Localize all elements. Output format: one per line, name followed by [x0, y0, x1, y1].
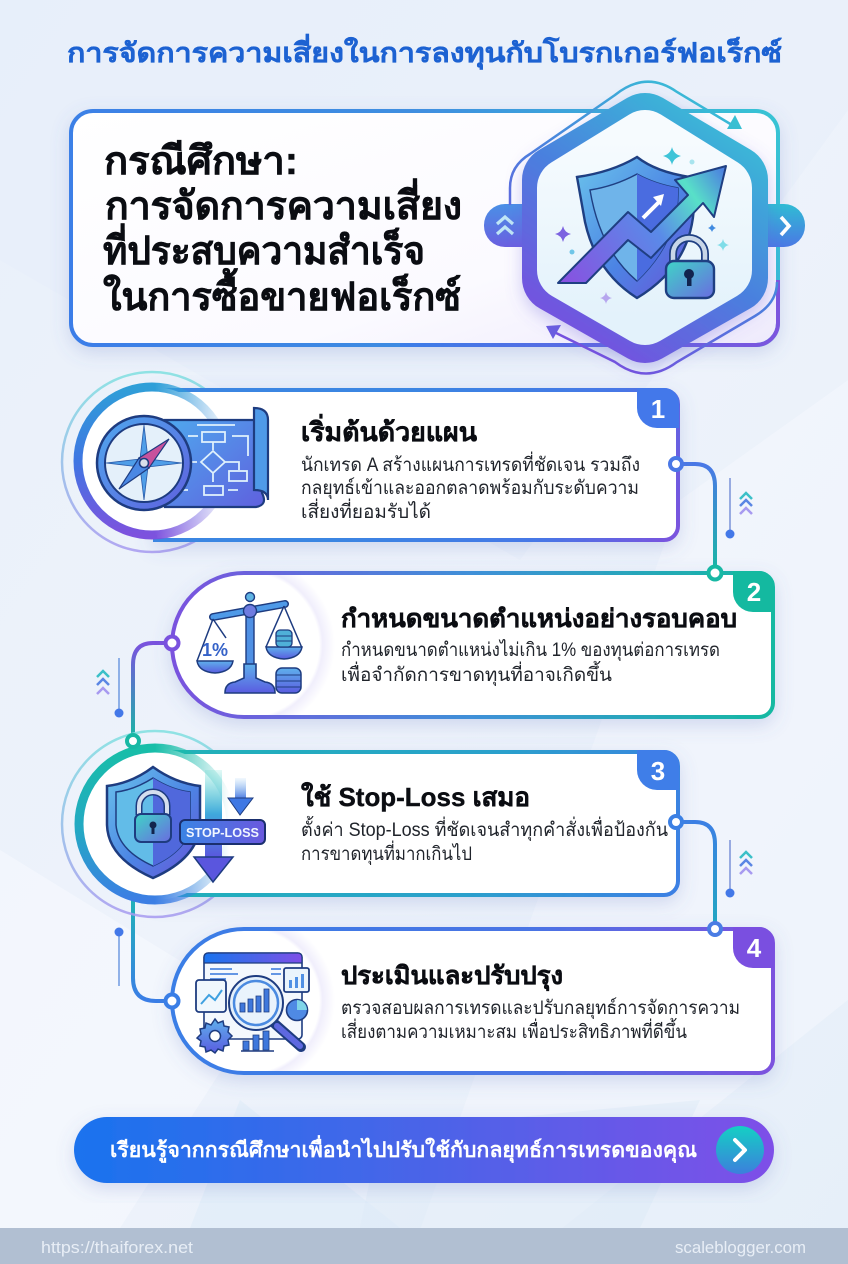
step 2 body: เพื่อจำกัดการขาดทุนที่อาจเกิดขึ้น	[341, 661, 612, 687]
hero heading: ในการซื้อขายฟอเร็กซ์	[103, 268, 461, 319]
icon: stop-loss arrows	[180, 770, 265, 882]
panel: step 4	[159, 913, 774, 1089]
step 1 heading: เริ่มต้นด้วยแผน	[301, 413, 477, 447]
panel: case study hero	[71, 82, 805, 374]
outer orbit arrows	[510, 82, 777, 374]
connector: step 2 to 3	[133, 643, 172, 741]
cta arrow button	[716, 1126, 764, 1174]
decoration: marker by step 4	[114, 928, 124, 986]
hero bottom edge	[400, 280, 778, 345]
decoration: marker and chevrons by step 1	[726, 478, 752, 538]
icon halo	[272, 931, 329, 1071]
connector: step 4 in	[133, 890, 172, 1001]
number tab 1: 1	[651, 394, 665, 424]
step 4 body: ตรวจสอบผลการเทรดและปรับกลยุทธ์การจัดการความ	[341, 997, 740, 1020]
number tab 4: 4	[747, 933, 762, 963]
hero heading: ที่ประสบความสำเร็จ	[103, 223, 425, 273]
step 2 body: กำหนดขนาดตำแหน่งไม่เกิน 1% ของทุนต่อการเทรด	[341, 639, 720, 662]
number tab 2	[733, 571, 774, 612]
icon: shield with rising arrow and lock	[555, 147, 729, 304]
step 3 heading: ใช้ Stop-Loss เสมอ	[301, 782, 530, 812]
step 2 body	[341, 639, 720, 687]
hero heading: กรณีศึกษา:	[104, 140, 298, 183]
right capsule	[745, 204, 805, 247]
icon: stop-loss arrows: STOP-LOSS	[186, 825, 259, 840]
connector nodes	[127, 458, 722, 1008]
panel: step 2	[159, 557, 774, 733]
icon: compass	[97, 416, 191, 510]
footer right url: scaleblogger.com	[675, 1238, 806, 1257]
step 4 body	[341, 997, 740, 1043]
step 1 body: กลยุทธ์เข้าและออกตลาดพร้อมกับระดับความ	[301, 477, 639, 500]
hero heading: การจัดการความเสี่ยง	[105, 178, 462, 228]
number tab 4	[733, 927, 774, 968]
step 4 heading: ประเมินและปรับปรุง	[341, 962, 563, 992]
card	[155, 390, 678, 540]
step 1 body: นักเทรด A สร้างแผนการเทรดที่ชัดเจน รวมถึง	[301, 451, 640, 476]
connector: step 3 to 4	[676, 822, 715, 929]
icon: analytics dashboard	[196, 953, 309, 1053]
card	[172, 573, 773, 717]
icon: shield with lock	[107, 767, 200, 878]
decoration: marker and chevrons by step 2	[97, 658, 124, 718]
step 3 body	[301, 816, 668, 866]
number tab 3: 3	[651, 756, 665, 786]
hero heading	[103, 140, 462, 319]
title: การจัดการความเสี่ยงในการลงทุนกับโบรกเกอร์ฟอเร็กซ์	[67, 33, 782, 70]
number tab 1	[637, 388, 679, 428]
connector: step 1 to 2	[676, 464, 715, 573]
left capsule	[484, 204, 544, 247]
panel: step 1	[62, 372, 679, 552]
cta text: เรียนรู้จากกรณีศึกษาเพื่อนำไปปรับใช้กับกลยุทธ์การเทรดของคุณ	[110, 1134, 698, 1164]
step 3 body: ตั้งค่า Stop-Loss ที่ชัดเจนสำทุกคำสั่งเพื่อป้องกัน	[301, 816, 668, 842]
footer bar	[0, 1228, 848, 1264]
circle badge	[78, 387, 226, 535]
call to action button	[74, 1117, 774, 1183]
decoration: marker and chevrons by step 3	[726, 840, 752, 898]
number tab 2: 2	[747, 577, 761, 607]
step 3 body: การขาดทุนที่มากเกินไป	[301, 840, 472, 866]
icon halo	[272, 575, 329, 715]
step 4 body: เสี่ยงตามความเหมาะสม เพื่อประสิทธิภาพที่ดีขึ้น	[341, 1018, 687, 1043]
card	[172, 929, 773, 1073]
icon: balance scale with coins: 1%	[202, 640, 228, 660]
step 2 heading: กำหนดขนาดตำแหน่งอย่างรอบคอบ	[341, 605, 737, 633]
footer left url: https://thaiforex.net	[41, 1238, 193, 1257]
step 1 body: เสี่ยงที่ยอมรับได้	[301, 498, 431, 523]
hero card	[71, 111, 778, 345]
icon: blueprint	[165, 408, 268, 507]
step 1 body	[301, 451, 640, 523]
number tab 3	[637, 750, 679, 790]
icon: balance scale with coins	[197, 592, 302, 693]
panel: step 3	[62, 731, 679, 917]
circle badge	[79, 748, 231, 900]
card	[155, 752, 678, 895]
thin ring	[62, 731, 248, 917]
thin ring	[62, 372, 242, 552]
hexagon badge	[557, 128, 733, 328]
